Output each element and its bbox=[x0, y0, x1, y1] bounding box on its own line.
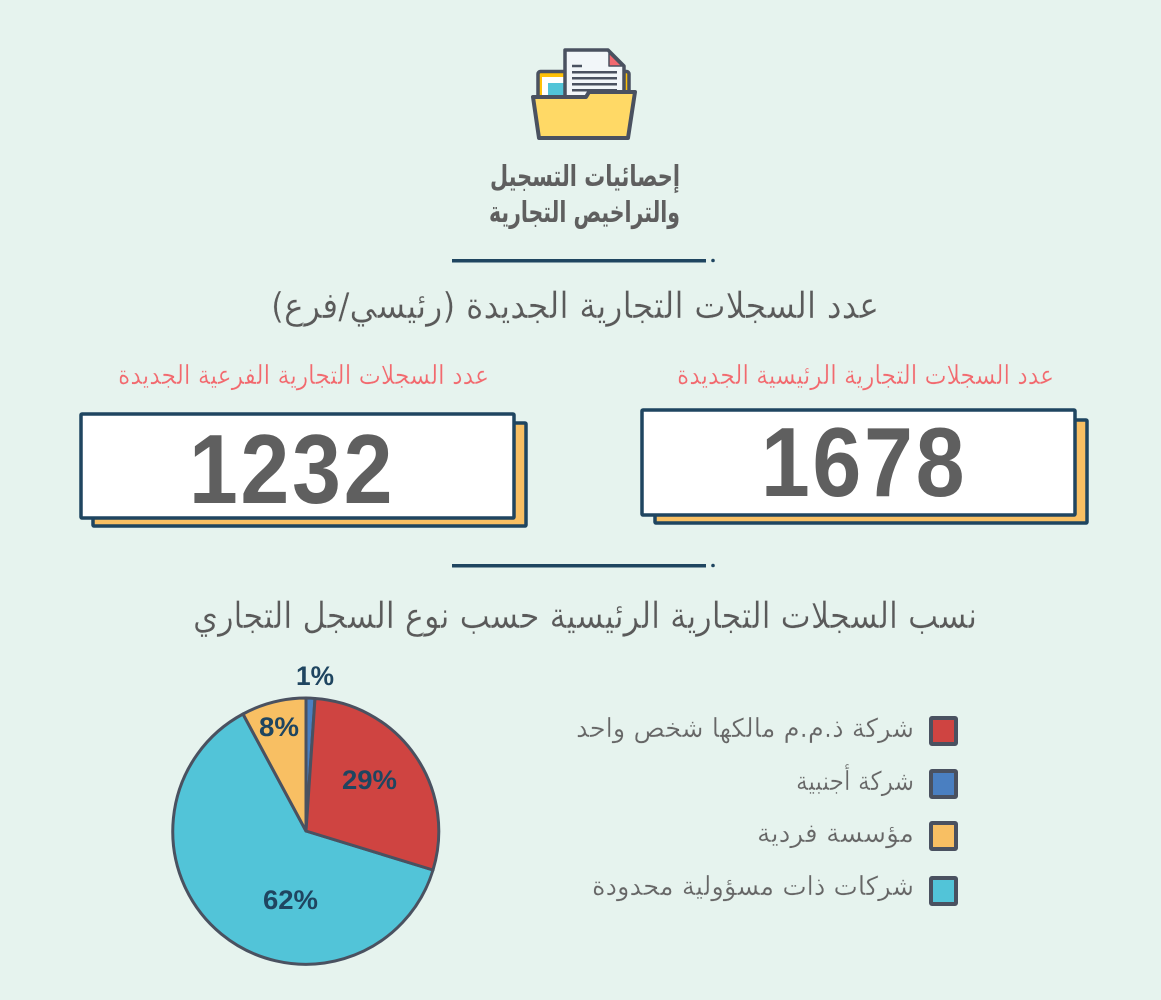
legend bbox=[576, 714, 956, 904]
label: branch registers: عدد السجلات التجارية الفرعية الجديدة bbox=[118, 361, 489, 391]
stat card: branch registers bbox=[81, 414, 526, 526]
heading: share by register type: نسب السجلات التجارية الرئيسية حسب نوع السجل التجاري bbox=[193, 596, 977, 637]
pie labels: 8% bbox=[259, 712, 299, 742]
pie labels: 29% bbox=[342, 765, 397, 795]
pie labels bbox=[259, 661, 397, 915]
slice: foreign company 1% bbox=[306, 698, 315, 831]
icon: folder with documents bbox=[533, 50, 635, 138]
pie labels: 1% bbox=[296, 661, 334, 691]
slice: single owner LLC 29% bbox=[306, 698, 439, 870]
legend item: sole establishment: مؤسسة فردية bbox=[757, 819, 914, 849]
pie chart bbox=[173, 698, 439, 964]
divider 2 bbox=[452, 564, 715, 568]
legend item: single owner LLC: شركة ذ.م.م مالكها شخص واحد bbox=[576, 714, 914, 744]
heading: new commercial registers: عدد السجلات التجارية الجديدة (رئيسي/فرع) bbox=[271, 286, 879, 327]
stat card: main registers: 1678 bbox=[761, 408, 967, 517]
stat card: main registers bbox=[642, 408, 1087, 523]
slice: sole establishment 8% bbox=[243, 698, 306, 831]
label: main registers: عدد السجلات التجارية الرئيسية الجديدة bbox=[677, 361, 1054, 391]
pie labels: 62% bbox=[263, 885, 318, 915]
title bbox=[489, 159, 680, 229]
slice: limited liability 62% bbox=[173, 714, 433, 964]
title: والتراخيص التجارية bbox=[489, 195, 680, 229]
legend item: foreign company: شركة أجنبية bbox=[796, 763, 914, 797]
title: إحصائيات التسجيل bbox=[490, 159, 680, 194]
divider 1 bbox=[452, 259, 715, 262]
stat card: branch registers: 1232 bbox=[189, 415, 395, 524]
legend item: limited liability: شركات ذات مسؤولية محدودة bbox=[592, 872, 914, 902]
